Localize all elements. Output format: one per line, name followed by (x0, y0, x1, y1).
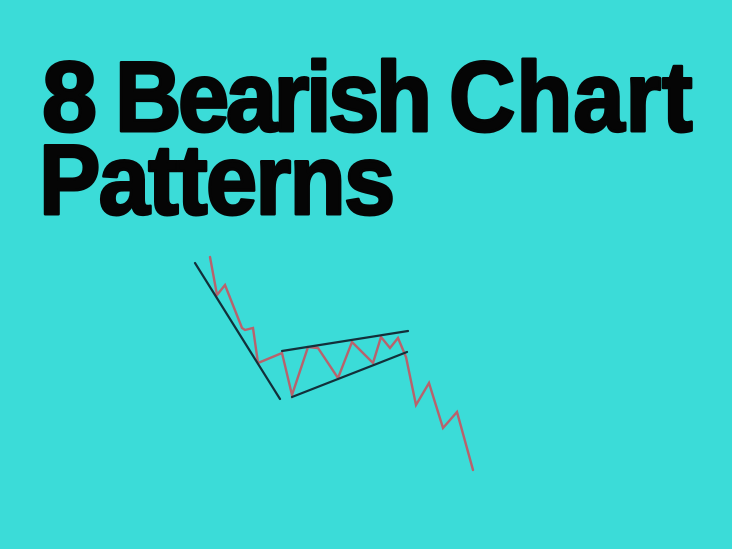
title: 8 (42, 41, 97, 152)
black trendlines (195, 263, 408, 399)
title: Bearish (115, 42, 432, 153)
title: Chart (449, 42, 693, 153)
title (39, 41, 693, 236)
chart: bearish pattern (195, 257, 473, 470)
red price line (210, 257, 473, 470)
title: Patterns (39, 125, 395, 236)
